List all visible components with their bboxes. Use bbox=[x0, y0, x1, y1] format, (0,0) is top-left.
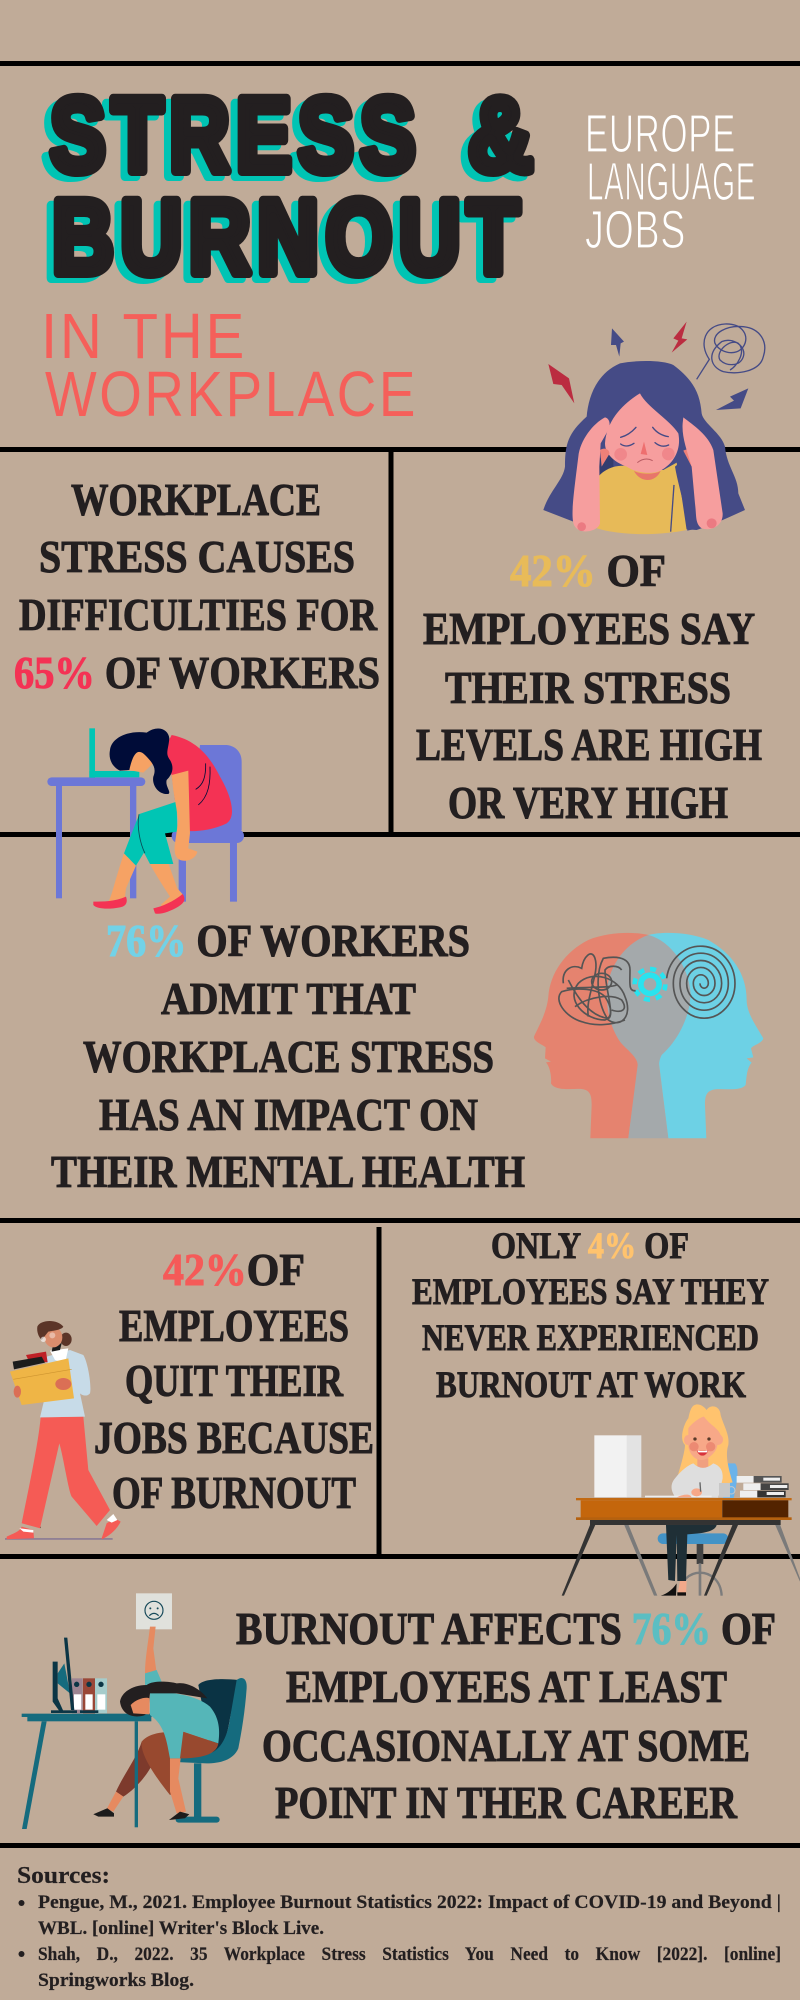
icon: burned-out woman at desk with sad face sign bbox=[22, 1593, 247, 1829]
stat: burnout affects 76%: EMPLOYEES AT LEAST bbox=[286, 1662, 727, 1712]
stat: 42% stress levels: OR VERY HIGH bbox=[448, 778, 728, 828]
stat: only 4% never experienced burnout: BURNOUT AT WORK bbox=[436, 1365, 746, 1406]
title: stress & burnout: & bbox=[468, 77, 540, 194]
stat: workplace stress 65%: WORKPLACE bbox=[71, 475, 321, 525]
stat: workplace stress 65%: DIFFICULTIES FOR bbox=[19, 590, 377, 640]
stat: 76% mental health bbox=[51, 916, 525, 1197]
icon: woman with headache bbox=[543, 322, 765, 534]
stat: 42% quit because of burnout: EMPLOYEES bbox=[119, 1301, 349, 1351]
stat: burnout affects 76% bbox=[236, 1604, 776, 1828]
title: stress & burnout bbox=[50, 77, 540, 296]
icon: smiling woman at desk bbox=[562, 1404, 800, 1596]
stat: 42% quit because of burnout: QUIT THEIR bbox=[125, 1356, 343, 1406]
stat: 42% quit because of burnout: OF BURNOUT bbox=[112, 1468, 356, 1518]
stat: 42% quit because of burnout bbox=[94, 1245, 374, 1518]
logo: europe language jobs: JOBS bbox=[585, 200, 686, 260]
subtitle: in the workplace: WORKPLACE bbox=[45, 358, 418, 430]
sources: WBL. [online] Writer's Block Live. bbox=[38, 1919, 324, 1939]
stat: 42% stress levels: THEIR STRESS bbox=[445, 663, 731, 713]
stat: only 4% never experienced burnout bbox=[412, 1226, 769, 1406]
stat: workplace stress 65%: STRESS CAUSES bbox=[39, 532, 355, 582]
stat: 42% stress levels bbox=[416, 546, 762, 828]
icon: two heads with tangled and spiral thoughts bbox=[534, 933, 763, 1138]
subtitle: in the workplace: IN THE bbox=[41, 300, 247, 372]
stat: 42% stress levels: EMPLOYEES SAY bbox=[423, 604, 755, 654]
stat: workplace stress 65%: 65% OF WORKERS bbox=[14, 648, 380, 698]
stat: workplace stress 65% bbox=[14, 475, 380, 698]
stat: 42% quit because of burnout: JOBS BECAUSE bbox=[94, 1413, 374, 1463]
sources bbox=[17, 1863, 781, 1991]
stat: only 4% never experienced burnout: ONLY 4% OF bbox=[491, 1226, 689, 1267]
stat: 42% stress levels: 42% OF bbox=[510, 546, 666, 596]
subtitle: in the workplace bbox=[41, 300, 418, 430]
title: stress & burnout: STRESS bbox=[50, 77, 422, 194]
stat: 76% mental health: THEIR MENTAL HEALTH bbox=[51, 1147, 525, 1197]
stat: 76% mental health: 76% OF WORKERS bbox=[106, 916, 470, 966]
stat: 76% mental health: WORKPLACE STRESS bbox=[83, 1032, 494, 1082]
sources: Sources: bbox=[17, 1863, 110, 1889]
icon: exhausted woman at laptop bbox=[47, 728, 244, 914]
sources: Pengue, M., 2021. Employee Burnout Statistics 2022: Impact of COVID-19 and Beyond | bbox=[38, 1893, 781, 1913]
icon: woman carrying a box bbox=[5, 1321, 121, 1539]
title: stress & burnout: BURNOUT bbox=[52, 179, 526, 296]
sources: Springworks Blog. bbox=[38, 1971, 194, 1991]
logo: europe language jobs bbox=[585, 104, 756, 260]
stat: 42% quit because of burnout: 42%OF bbox=[163, 1245, 305, 1295]
stat: burnout affects 76%: BURNOUT AFFECTS 76% OF bbox=[236, 1604, 776, 1654]
stat: 76% mental health: ADMIT THAT bbox=[161, 974, 416, 1024]
stat: 76% mental health: HAS AN IMPACT ON bbox=[99, 1090, 478, 1140]
